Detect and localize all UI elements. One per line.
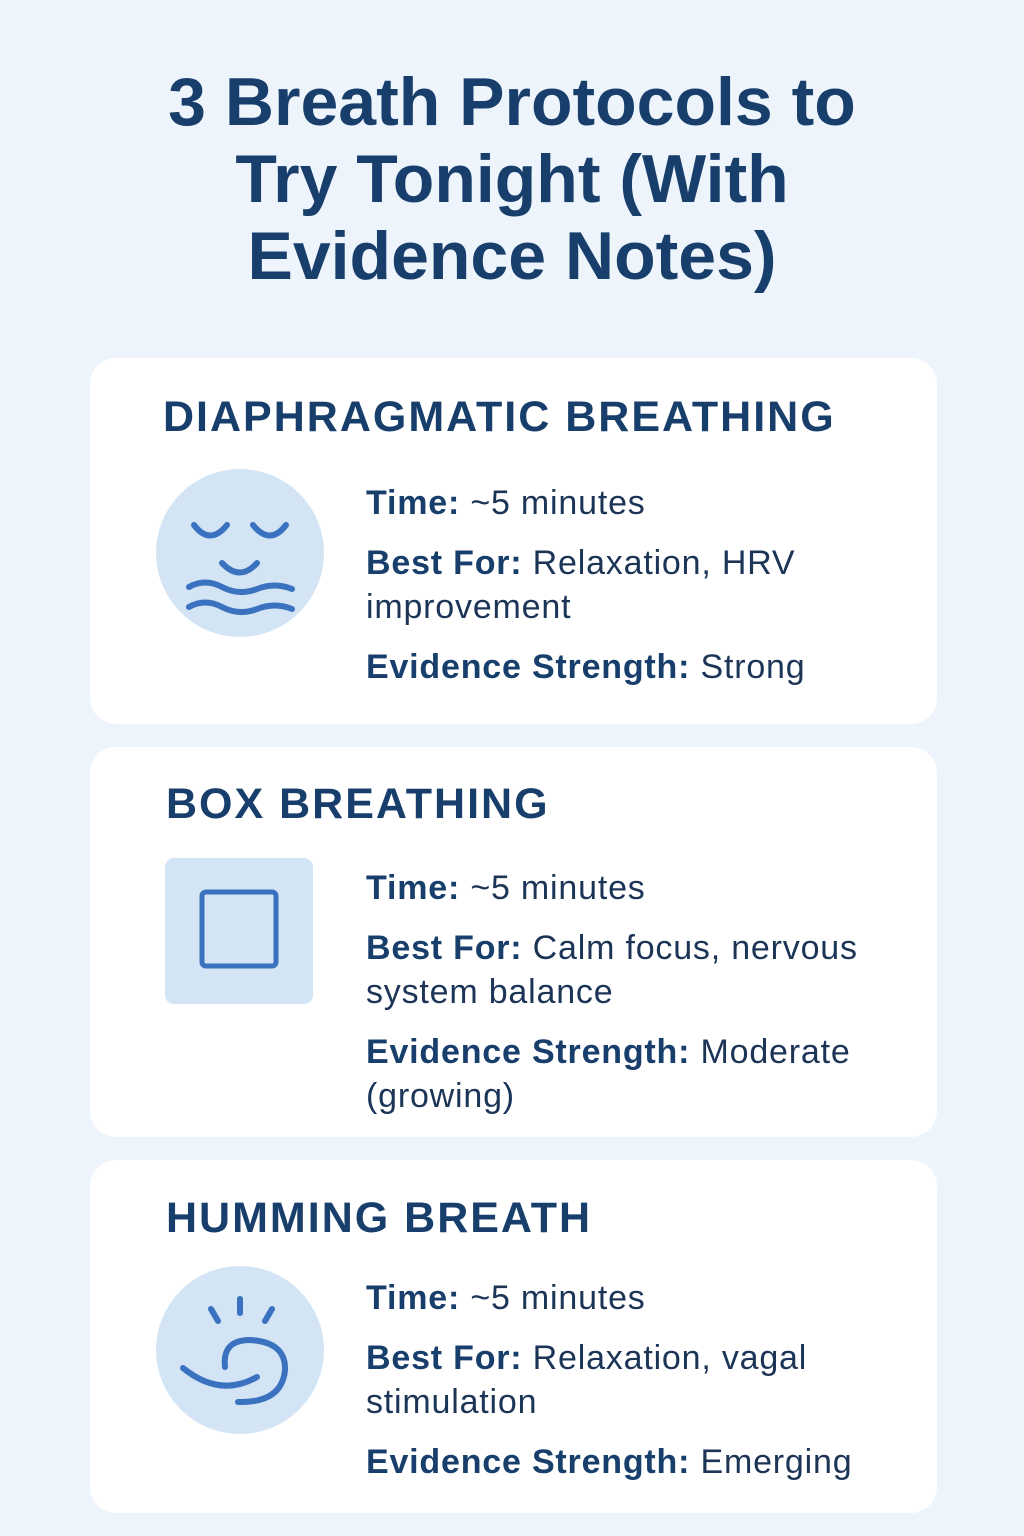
details: (growing) xyxy=(366,1077,515,1115)
details: Best For: Relaxation, vagal xyxy=(366,1339,807,1377)
heading: humming: HUMMING BREATH xyxy=(166,1194,592,1242)
details xyxy=(366,869,858,1115)
details: Evidence Strength: Strong xyxy=(366,648,805,686)
icon: humming swirl xyxy=(156,1266,324,1434)
details: Evidence Strength: Moderate xyxy=(366,1033,851,1071)
details: Evidence Strength: Emerging xyxy=(366,1443,852,1481)
panel: humming breath xyxy=(90,1160,937,1513)
panel: diaphragmatic breathing xyxy=(90,358,937,724)
panel: box breathing xyxy=(90,747,937,1137)
details: Best For: Calm focus, nervous xyxy=(366,929,858,967)
details: Time: ~5 minutes xyxy=(366,869,646,907)
heading: diaphragmatic: DIAPHRAGMATIC BREATHING xyxy=(163,393,836,441)
details: improvement xyxy=(366,588,571,626)
heading: box: BOX BREATHING xyxy=(166,780,550,828)
details: system balance xyxy=(366,973,613,1011)
title xyxy=(168,64,856,294)
details: Best For: Relaxation, HRV xyxy=(366,544,795,582)
title: Try Tonight (With xyxy=(235,141,789,217)
icon: calm face with waves xyxy=(156,469,324,637)
title: 3 Breath Protocols to xyxy=(168,64,856,140)
details xyxy=(366,484,805,686)
details: stimulation xyxy=(366,1383,537,1421)
title: Evidence Notes) xyxy=(247,218,777,294)
details xyxy=(366,1279,852,1481)
details: Time: ~5 minutes xyxy=(366,1279,646,1317)
details: Time: ~5 minutes xyxy=(366,484,646,522)
icon: square xyxy=(165,858,313,1004)
